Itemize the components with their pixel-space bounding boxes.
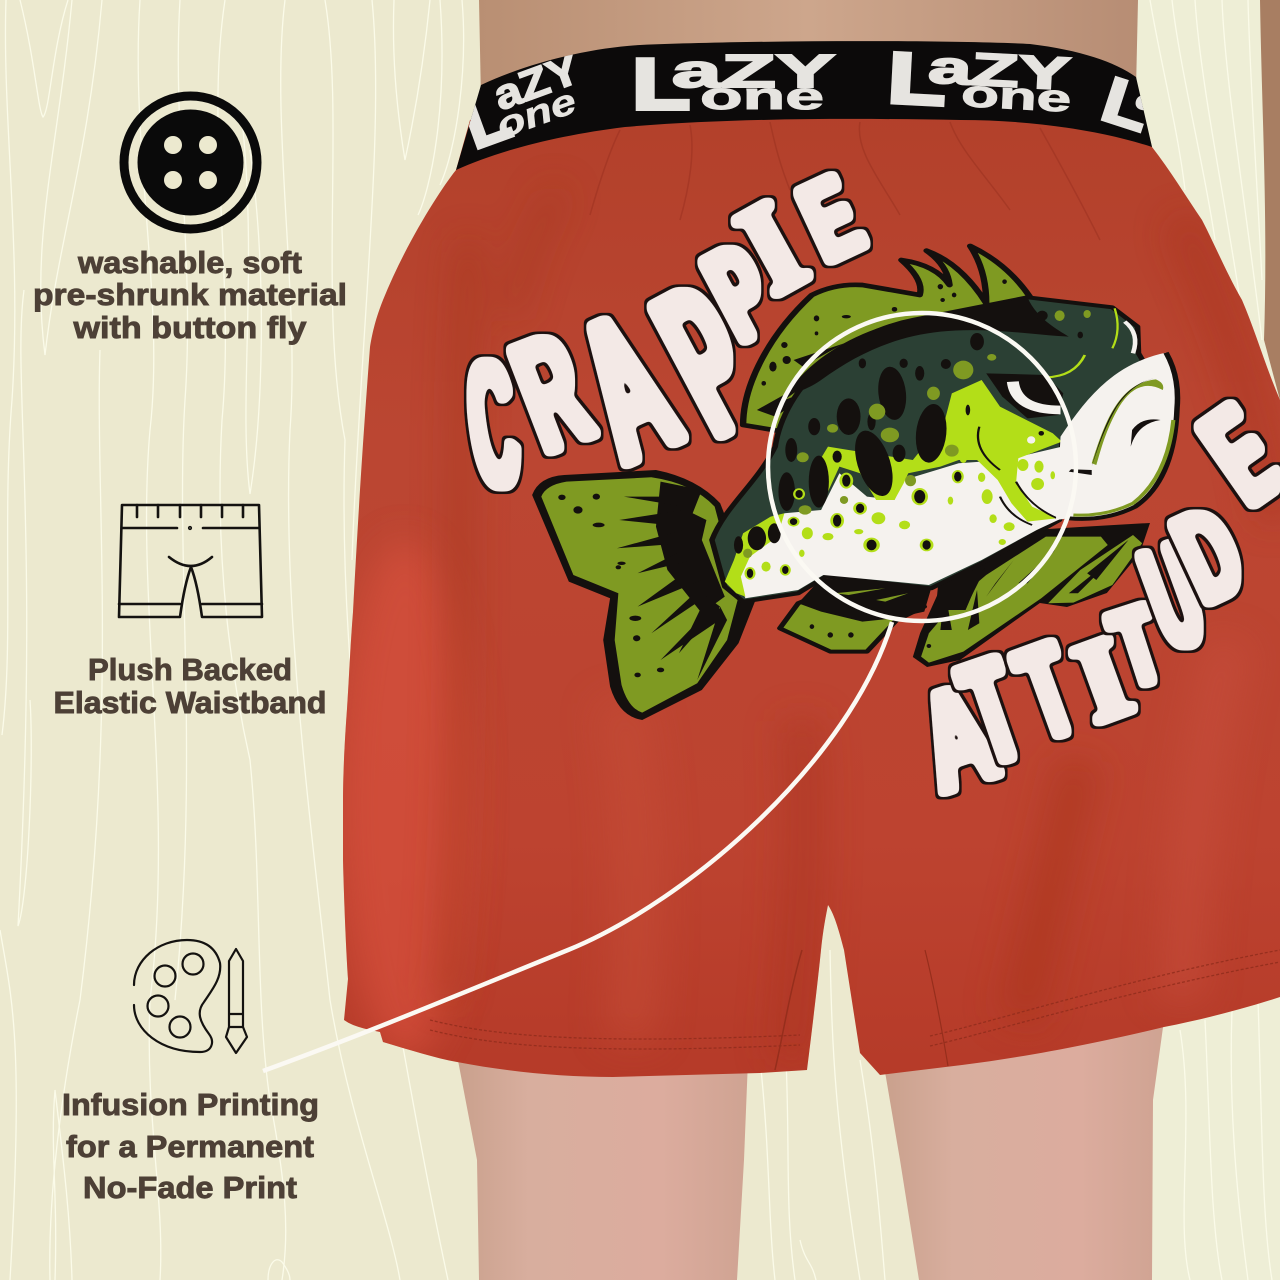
logo: right: [1100, 76, 1144, 134]
graphic lettering: ATTITUDE: T: [943, 626, 1040, 796]
graphic lettering: ATTITUDE: T: [1098, 582, 1176, 712]
graphic lettering: CRAPPIE: I: [717, 174, 827, 322]
fish lower fins: [780, 523, 1150, 667]
graphic: fish: [532, 246, 1177, 720]
gathers under the waistband: [590, 122, 1100, 240]
text: washable material: [33, 245, 347, 345]
graphic lettering: ATTITUDE: U: [1124, 511, 1221, 681]
fish gill lines: [978, 427, 1057, 525]
fish tail: [532, 470, 757, 720]
text: plush waistband: [54, 652, 326, 720]
logo: center right: one: [960, 73, 1072, 121]
hem stitching: [430, 950, 1280, 1049]
graphic lettering: CRAPPIE: [457, 152, 879, 527]
text: plush waistband: Elastic Waistband: [54, 685, 326, 720]
graphic lettering: CRAPPIE: R: [492, 298, 611, 486]
graphic lettering: ATTITUDE: D: [1155, 480, 1263, 631]
fish mouth: [1056, 308, 1177, 520]
icon: button: [124, 96, 257, 229]
graphic lettering: CRAPPIE: A: [548, 268, 705, 506]
logo: right: a: [1131, 70, 1168, 122]
graphic lettering: CRAPPIE: C: [457, 321, 529, 527]
logo: center right: [890, 50, 1073, 112]
text: washable material: washable, soft: [77, 245, 302, 280]
graphic lettering: ATTITUDE: T: [1000, 614, 1094, 769]
logo: left: L: [452, 75, 521, 165]
text: infusion printing: for a Permanent: [66, 1129, 314, 1164]
text: washable material: with button fly: [72, 310, 307, 345]
fish belly: [734, 447, 1062, 598]
shading: fabric folds: [445, 190, 1275, 1060]
callout lens and connector: [263, 313, 1076, 1071]
text: infusion printing: Infusion Printing: [62, 1087, 319, 1122]
fish spots: [734, 311, 1083, 554]
graphic lettering: ATTITUDE: [901, 375, 1280, 823]
text: washable material: pre-shrunk material: [33, 277, 347, 312]
fish dark back: [787, 297, 1069, 393]
fish eye: [986, 355, 1085, 418]
fish dorsal fin: [743, 246, 1032, 433]
graphic lettering: ATTITUDE: A: [901, 654, 1013, 823]
logo: center left: [636, 54, 837, 111]
shading: left side glow: [340, 540, 470, 1060]
fish body: [712, 297, 1177, 602]
text: infusion printing: No-Fade Print: [83, 1170, 297, 1205]
model: torso skin: [479, 0, 1138, 100]
model: right leg: [883, 1020, 1164, 1280]
graphic lettering: CRAPPIE: P: [684, 216, 796, 369]
model: right arm: [1260, 0, 1280, 400]
icon: palette and brush: [134, 940, 247, 1053]
graphic lettering: CRAPPIE: P: [624, 240, 789, 480]
model: left leg: [456, 1050, 748, 1280]
logo: left: aZY: [487, 45, 586, 119]
fish lime markings: [812, 380, 1062, 522]
graphic lettering: CRAPPIE: E: [783, 152, 879, 285]
graphic lettering: ATTITUDE: I: [1059, 612, 1147, 748]
logo: center left: L: [632, 45, 690, 125]
logo: center right: L: [886, 38, 948, 121]
logo: right: L: [1094, 63, 1160, 146]
logo: left: [468, 54, 575, 150]
text: infusion printing: [62, 1087, 319, 1205]
text: plush waistband: Plush Backed: [88, 652, 292, 687]
logo: left: one: [491, 80, 582, 146]
logo: center left: one: [700, 76, 824, 118]
logo: center left: aZY: [672, 45, 835, 97]
waistband with logos: [451, 38, 1168, 170]
boxer shorts: [330, 90, 1280, 1090]
icon: boxer shorts: [119, 505, 262, 617]
logo: center right: aZY: [927, 40, 1072, 100]
